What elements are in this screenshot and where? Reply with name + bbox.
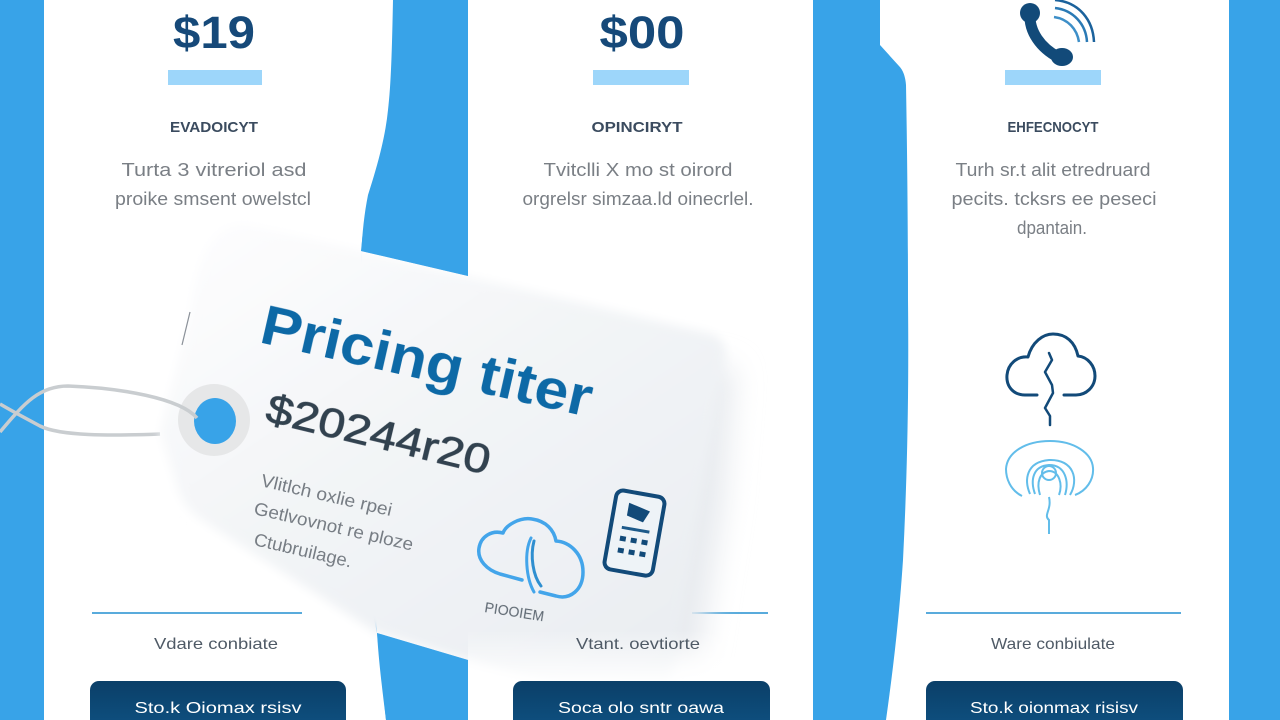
tag description: Getlvovnot re ploze: [252, 498, 415, 555]
footer note: Vdare conbiate: [154, 636, 278, 653]
description: dpantain.: [1017, 218, 1087, 238]
tag description: Ctubruilage.: [252, 529, 354, 571]
accent bar: [593, 70, 689, 85]
middle footer note: Vtant. oevtiorte: [576, 636, 700, 653]
description: pecits. tcksrs ee peseci: [952, 189, 1156, 209]
tag white base over blue gap: [361, 251, 468, 660]
blue gap below tag: [377, 633, 468, 720]
icon: phone with signal: [1020, 0, 1094, 66]
divider: [926, 612, 1181, 614]
tag price: $20244r20: [262, 385, 495, 483]
panel: right tier card: [880, 0, 1229, 720]
divider: [92, 612, 302, 614]
tag shadow: [650, 360, 735, 670]
middle button: [513, 681, 770, 720]
tier heading: OPINCIRYT: [592, 119, 682, 136]
panel: middle tier card: [468, 0, 813, 720]
tag icon caption: PIOOIEM: [483, 599, 545, 625]
upper string strand: [0, 386, 197, 432]
price: $19: [173, 7, 255, 58]
button: [90, 681, 346, 720]
button label: Sto.k oionmax risisv: [970, 700, 1138, 717]
tag description: Vlitlch oxlie rpei: [259, 470, 394, 520]
button: [926, 681, 1183, 720]
icon: cloud with phone: [479, 519, 583, 597]
tag title: Pricing titer: [255, 292, 599, 429]
tier heading: EVADOICYT: [170, 119, 258, 136]
footer note: Ware conbiulate: [991, 636, 1115, 653]
price: $00: [600, 7, 684, 58]
panel: price tag: [0, 224, 813, 720]
description: Turh sr.t alit etredruard: [956, 160, 1150, 180]
panel: left tier card: [44, 0, 393, 720]
icon: cloud with crack: [1007, 334, 1095, 425]
accent bar: [1005, 70, 1101, 85]
divider: [692, 612, 768, 614]
tag description: [252, 470, 415, 571]
description: Tvitclli X mo st oirord: [544, 160, 732, 180]
tag body: [160, 224, 725, 720]
eyelet hole: [194, 398, 236, 444]
description: [115, 160, 311, 209]
accent bar: [168, 70, 262, 85]
description: orgrelsr simzaa.ld oinecrlel.: [522, 189, 754, 209]
left button label: Sto.k Oiomax rsisv: [134, 700, 302, 717]
eyelet ring: [178, 384, 250, 456]
fade at tag bottom: [468, 630, 813, 685]
edge mark: [182, 312, 190, 345]
description: [522, 160, 754, 209]
tier heading: EHFECNOCYT: [1008, 119, 1098, 136]
lower string strand: [0, 404, 160, 435]
description: [952, 160, 1156, 238]
blue gap above tag: [361, 236, 468, 276]
icon: keypad device: [603, 489, 666, 577]
description: Turta 3 vitreriol asd: [122, 160, 306, 180]
icon: concentric signal dome: [1006, 441, 1093, 534]
description: proike smsent owelstcl: [115, 189, 311, 209]
middle button label: Soca olo sntr oawa: [558, 700, 724, 717]
